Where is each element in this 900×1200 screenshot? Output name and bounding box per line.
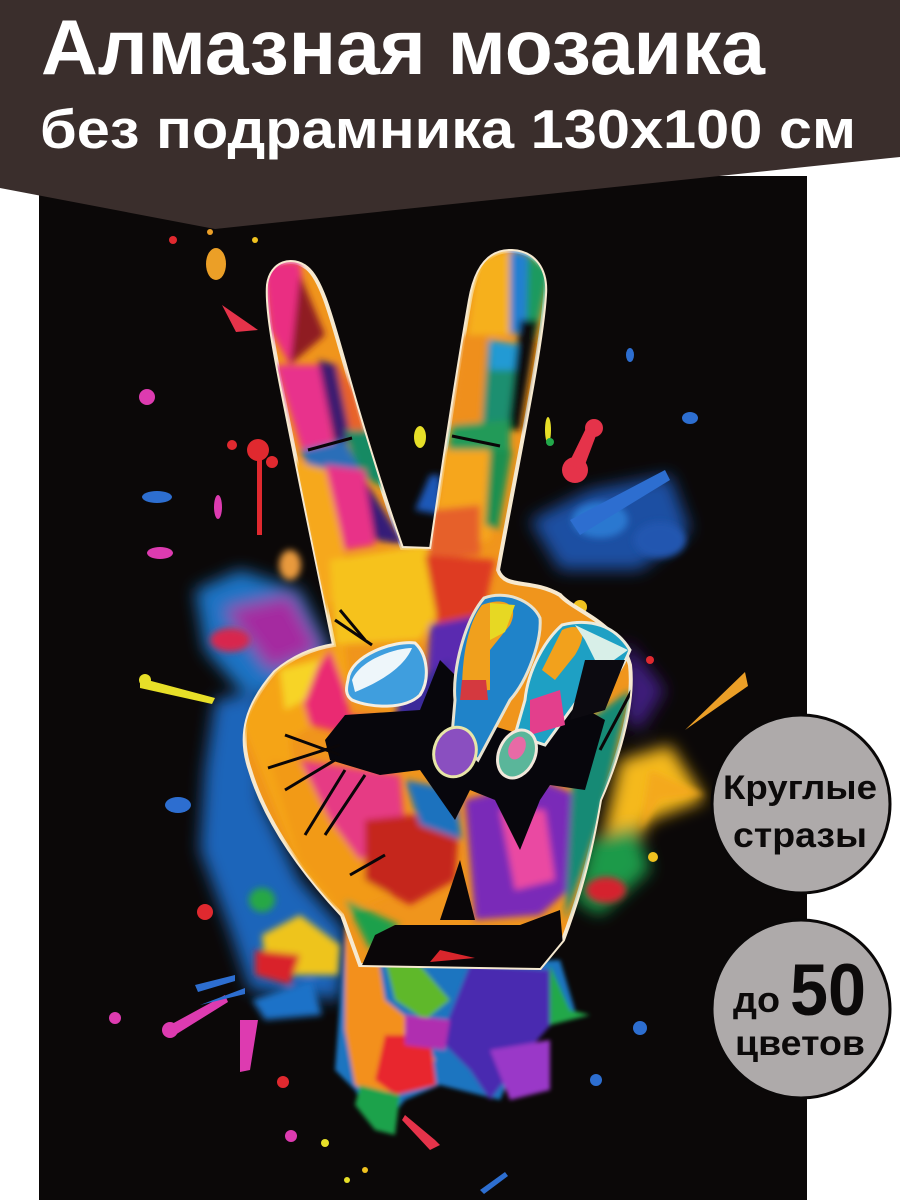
badge: round rhinestones: стразы bbox=[733, 816, 867, 855]
finger: middle curled bbox=[452, 595, 540, 760]
bottom wrist splash bbox=[335, 925, 590, 1135]
badge: round rhinestones bbox=[712, 715, 890, 893]
dark centre of the fist bbox=[325, 660, 605, 850]
right finger colours bbox=[468, 250, 512, 335]
fold strokes on the fist bbox=[268, 436, 632, 875]
badge: round rhinestones: Круглые bbox=[723, 769, 877, 807]
paint splatter bbox=[109, 229, 748, 1194]
upper palm colours bbox=[330, 545, 445, 645]
badge: up to 50 colours: до bbox=[733, 979, 780, 1020]
left finger colours bbox=[262, 262, 305, 365]
badge: up to 50 colours bbox=[712, 920, 890, 1098]
hand with painted colours bbox=[240, 250, 632, 970]
thumb nail bbox=[347, 643, 426, 706]
splash clouds bbox=[195, 475, 705, 1000]
lower palm colours bbox=[270, 760, 400, 915]
dark band above the wrist bbox=[360, 910, 565, 970]
badge: up to 50 colours: 50 bbox=[790, 950, 866, 1031]
title: Алмазная мозаика bbox=[41, 3, 766, 91]
fingernails bbox=[428, 722, 544, 784]
badge: up to 50 colours: цветов bbox=[735, 1024, 865, 1063]
artwork background bbox=[39, 176, 807, 1200]
thumb and left fist bbox=[240, 645, 350, 915]
subtitle: без подрамника 130х100 см bbox=[40, 98, 856, 160]
header banner bbox=[0, 0, 900, 229]
finger: ring curled bbox=[515, 622, 630, 745]
